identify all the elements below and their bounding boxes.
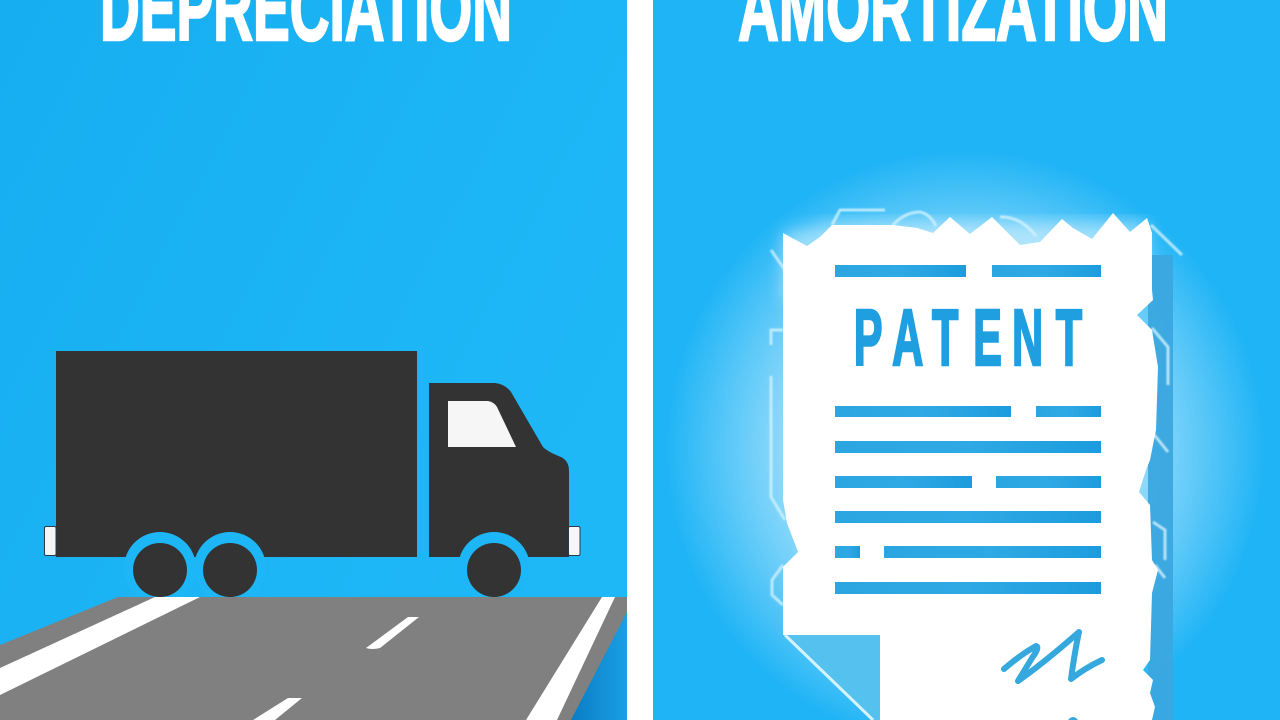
icon: patent document [783,213,1158,720]
fold glow line [785,635,873,720]
signature [1004,632,1102,681]
front light [568,526,580,556]
signature tail mark [1068,717,1078,720]
document text lines [835,265,1101,594]
paper side shadow band [1148,255,1173,720]
truck window [448,401,516,447]
glowing circuit lines [771,210,1182,605]
folded corner [785,635,880,720]
road surface [0,597,627,720]
road side shading [570,610,627,720]
icon: truck [44,351,580,604]
rear light [44,526,56,556]
centre dash lower [253,698,302,720]
road [0,597,627,720]
patent label: PATENT [854,293,1082,382]
right road edge stripe [526,597,615,720]
divider [627,0,653,720]
inner glow around paper top [783,222,1147,300]
radial glow [653,150,1280,720]
panel: amortization [653,0,1280,720]
panel: depreciation [0,0,627,720]
truck cab [429,383,569,557]
centre dash upper [366,617,419,649]
panel background left [0,0,627,720]
truck cargo box [56,351,417,557]
left road edge stripe [0,597,200,695]
wheel arches [124,532,530,604]
panel background right [653,0,1280,720]
wheels [133,543,521,597]
torn paper sheet [783,213,1158,720]
